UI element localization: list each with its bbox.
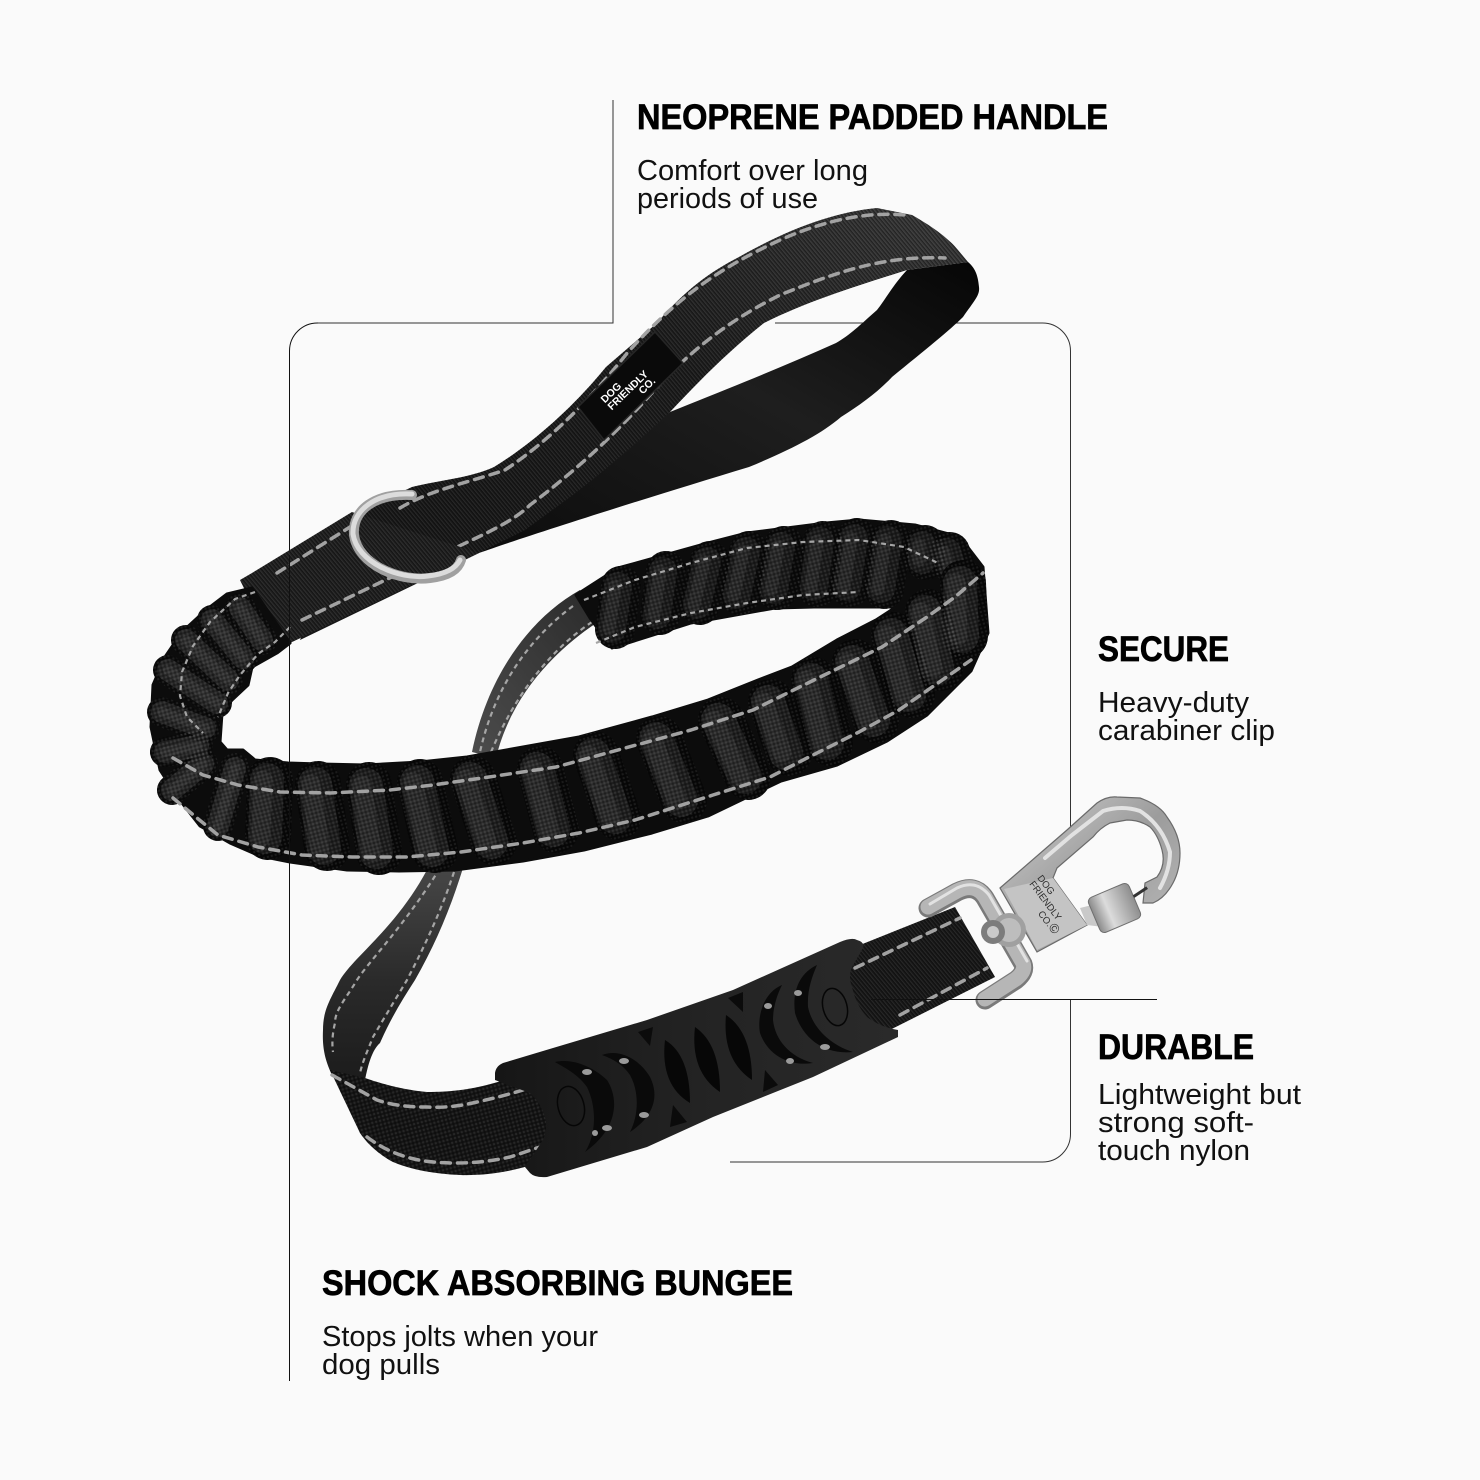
dots visible through crescents [582,990,830,1136]
engraved brand: FRIENDLY [1027,879,1064,923]
gate pin [1080,905,1103,927]
grip ovals [553,986,852,1129]
handle nylon strap [300,208,968,640]
grip triangles [638,992,778,1127]
description: Lightweight but [1098,1079,1301,1111]
engraved brand: CO. [1035,909,1054,929]
lower strap segment [323,862,575,1175]
strap between D-ring and bungee [240,512,479,652]
callout lines over the leash [290,555,1157,1000]
brand patch: DOG [599,380,624,406]
description: Stops jolts when your [322,1321,598,1353]
heading: SHOCK ABSORBING BUNGEE [322,1264,793,1303]
bungee silhouette [151,520,988,871]
D-ring [353,494,461,579]
heading: SECURE [1098,630,1229,669]
callout frame lines behind the leash [289,100,1070,1381]
back strap segment [472,590,604,758]
handle reflective stitching [400,214,905,508]
callout: shock absorbing bungee [322,1264,793,1381]
leash illustration [151,208,1180,1177]
callout: durable [1098,1028,1301,1167]
neoprene padded handle [300,208,979,640]
description [1098,1079,1301,1167]
description [637,155,868,215]
callout: secure [1098,630,1275,747]
engraved brand [1018,873,1077,937]
back bungee stitching [584,540,938,643]
description: Heavy-duty [1098,687,1250,719]
engraved brand: DOG [1035,873,1056,897]
bungee stitching [173,573,983,857]
back bungee pleats [609,538,954,629]
gate barrel [1087,876,1157,934]
grip lens holes [664,1015,752,1103]
carabiner clip [928,797,1180,1000]
engraved brand: © [1046,920,1064,937]
hook body [1000,797,1180,952]
left curl pleats [162,608,262,826]
swivel bolt [981,913,1026,947]
brand patch: CO. [636,375,658,397]
hook highlight [1045,808,1170,888]
brand patch [578,332,683,440]
rubber grip [495,939,898,1177]
grip crescent holes [555,965,853,1152]
neoprene inner lining [479,262,979,553]
shock absorbing bungee [151,520,988,871]
front bungee pleats [261,583,965,852]
description: Comfort over long [637,155,868,187]
description [1098,687,1275,747]
heading: NEOPRENE PADDED HANDLE [637,98,1108,137]
brand patch: FRIENDLY [606,368,651,413]
description: carabiner clip [1098,715,1275,747]
description: dog pulls [322,1349,440,1381]
description: periods of use [637,183,818,215]
callout: neoprene padded handle [637,98,1108,215]
description: touch nylon [1098,1135,1250,1167]
swivel frame [928,885,1027,1000]
description: strong soft- [1098,1107,1254,1139]
hook plate [1004,878,1087,950]
heading: DURABLE [1098,1028,1254,1067]
front strap to swivel [835,907,995,1040]
description [322,1321,598,1381]
